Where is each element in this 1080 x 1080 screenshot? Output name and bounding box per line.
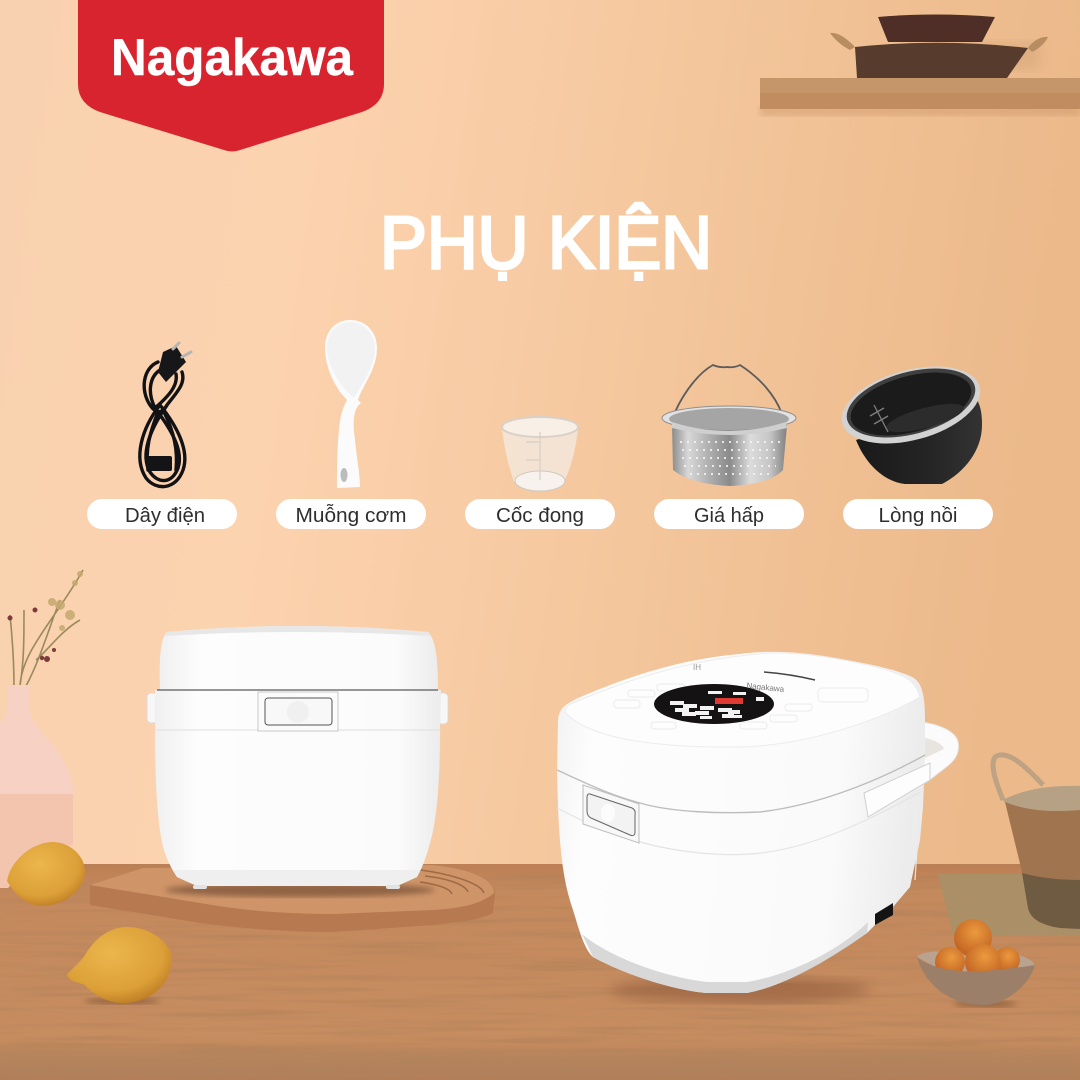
label: rice spoon: Muỗng cơm [296, 504, 406, 527]
lemon: front [67, 927, 172, 1004]
accessory: power cord [140, 343, 191, 487]
label: inner pot: Lòng nồi [878, 505, 958, 527]
label: steamer: Giá hấp [694, 505, 764, 527]
accessory: steamer basket [662, 365, 796, 486]
body [557, 652, 925, 993]
lid and band seams [557, 755, 925, 880]
label: steamer [654, 499, 804, 529]
brand badge [78, 0, 384, 152]
rice cooker: back view [147, 626, 448, 889]
placemat [938, 874, 1080, 935]
title: PHỤ KIỆN [380, 201, 712, 284]
front latch [583, 785, 639, 843]
lemon: left [7, 842, 85, 906]
side handle grip [864, 763, 930, 817]
control buttons [614, 684, 868, 729]
display panel [654, 684, 774, 724]
lid release button [764, 672, 815, 680]
power socket [875, 903, 893, 925]
basket base [1022, 873, 1080, 929]
accessory: measuring cup [502, 417, 578, 491]
label: power cord: Dây điện [125, 505, 205, 527]
rice cooker: front view [557, 652, 958, 1002]
bowl with tomatoes [917, 919, 1035, 1007]
basket [993, 755, 1080, 880]
wooden shelf with bowls [760, 14, 1080, 116]
back latch [258, 692, 338, 731]
IH mark: IH [693, 663, 701, 672]
label: measuring cup: Cốc đong [496, 505, 584, 527]
handle [863, 722, 958, 817]
accessory: rice spoon [325, 320, 377, 488]
label: rice spoon [276, 499, 426, 529]
table surface [0, 864, 1080, 1080]
label: power cord [87, 499, 237, 529]
logo text: Nagakawa [111, 29, 354, 87]
dried flowers and vase [0, 570, 83, 888]
brand on lid: Nagakawa [746, 681, 785, 694]
labels row [87, 499, 993, 529]
wooden trivet [90, 865, 495, 932]
top plate [565, 653, 920, 747]
label: inner pot [843, 499, 993, 529]
base trim [582, 922, 868, 993]
accessory: inner pot [833, 353, 989, 484]
label: measuring cup [465, 499, 615, 529]
